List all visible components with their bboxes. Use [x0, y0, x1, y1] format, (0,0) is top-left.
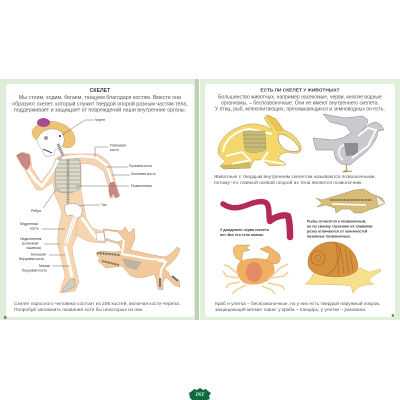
illustration: fish [316, 189, 385, 213]
caption: worm: нет. Все его тело мягкое. [220, 233, 264, 237]
label: humerus [95, 144, 126, 157]
text block: intro: поддерживает и защищает от повреждений наши внутренние органы. [14, 106, 186, 114]
label: tibia: берцовая кость [19, 257, 44, 261]
label: femur [20, 222, 65, 230]
illustration: earthworm [223, 202, 290, 237]
caption: fish: но по своему строению их плавники [307, 224, 372, 228]
caption: worm: У дождевого червя скелета [220, 228, 270, 232]
label: humerus: кость [110, 148, 119, 152]
label: patella: (коленная [22, 242, 38, 246]
caption: worm [220, 228, 270, 237]
text block: bones count [14, 300, 180, 313]
illustration: crab [223, 245, 288, 294]
illustration: dog [96, 227, 180, 290]
label: fibula: берцовая кость [22, 268, 47, 272]
back leg bones [82, 218, 96, 238]
text block: crab and snail: Краб и улитка – беспозвоночные, но у них есть твердый наружный покров, [215, 300, 380, 307]
label: patella [20, 237, 60, 250]
label: skull: Череп [95, 118, 105, 122]
label: radius: Лучевая кость [129, 164, 152, 168]
text block: invertebrates: организмы, – беспозвоночные. Они не имеют внутреннего скелета. [221, 100, 379, 106]
heading: animals: ЕСТЬ ЛИ СКЕЛЕТ У ЖИВОТНЫХ? [260, 88, 340, 94]
label: ulna: Локтевая кость [131, 172, 156, 176]
skull [38, 129, 64, 157]
text block: invertebrates: У птиц, рыб, млекопитающих, пресмыкающихся и земноводных он есть. [215, 106, 385, 112]
label: femur: Бедренная [20, 222, 38, 226]
caption: fish: Рыбы относятся к позвоночным, [307, 220, 366, 224]
caption: fish: наземных позвоночных. [307, 234, 351, 238]
right hand [109, 182, 119, 198]
label: humerus: Плечевая [110, 144, 126, 148]
text block: vertebrates: Животные с твердым внутренним скелетом называются позвоночными, [214, 174, 376, 180]
label: pelvis [79, 203, 107, 207]
text block: vertebrates [214, 174, 376, 186]
text block: intro [12, 95, 188, 114]
left arm bones [27, 160, 58, 186]
back foot bones [96, 232, 105, 241]
text block: intro: образуют скелет, который служит твердой опорой разным частям тела, [12, 100, 188, 108]
label: ribs: Ребра [31, 209, 41, 213]
illustration: rabbit [218, 115, 301, 169]
heading: skeleton: СКЕЛЕТ [90, 88, 111, 94]
logo badge: INT [195, 393, 205, 398]
label: fibula: Малая [39, 264, 50, 268]
label: femur: кость [30, 226, 39, 230]
body silhouette: rear leg [76, 212, 106, 243]
caption: fish [307, 220, 372, 238]
label: spine [76, 184, 152, 188]
ribcage [55, 157, 81, 193]
label: skull [62, 118, 105, 135]
text block: intro: Мы стоим, ходим, бегаем, танцуем благодаря костям. Вместе они [19, 95, 181, 101]
logo badge [189, 388, 211, 400]
page number 9: 9 [391, 313, 394, 318]
illustration: bird [313, 114, 384, 172]
text block: crab and snail: защищающий мягкие ткани: у краба – панцирь, у улитки – раковина. [215, 306, 366, 313]
label: pelvis: Таз [101, 203, 107, 207]
label: ulna [112, 172, 156, 176]
foot [62, 279, 75, 292]
text block: vertebrates: потому что главной осевой опорой их тела является позвоночник. [214, 179, 363, 186]
right arm bones [62, 156, 112, 182]
label: radius [106, 164, 152, 168]
text block: bones count: Скелет взрослого человека состоит из 206 костей, включая кости черепа. [14, 300, 180, 307]
panel: left page [0, 79, 199, 320]
front leg bones [66, 217, 75, 243]
page number 8: 8 [4, 315, 7, 320]
text block: bones count: Попробуй запомнить названия хотя бы некоторых из них. [14, 306, 144, 313]
icon: flower on hat [37, 118, 50, 127]
label: patella: Надколенник [20, 237, 42, 241]
illustration: snail [305, 242, 381, 293]
text block: crab and snail [215, 300, 380, 313]
label: tibia: Большая [31, 252, 46, 256]
pelvis [65, 204, 82, 218]
body silhouette: torso and arms [16, 152, 120, 293]
label: ribs [31, 190, 56, 213]
label: fibula [22, 264, 70, 272]
panel: right page [200, 79, 400, 320]
spine [67, 158, 69, 204]
text block: invertebrates: Большинство животных, например насекомые, черви, многие водные [218, 94, 382, 100]
caption: fish: резко отличаются от конечностей [307, 230, 367, 234]
label: patella: чашечка) [26, 246, 41, 250]
label: spine: Позвоночник [131, 184, 152, 188]
illustration: running human skeleton [16, 118, 180, 293]
neck vertebrae [58, 144, 64, 158]
left hand [17, 153, 30, 170]
label: tibia [19, 252, 65, 261]
icon: hat [32, 121, 75, 148]
text block: invertebrates [215, 94, 385, 112]
